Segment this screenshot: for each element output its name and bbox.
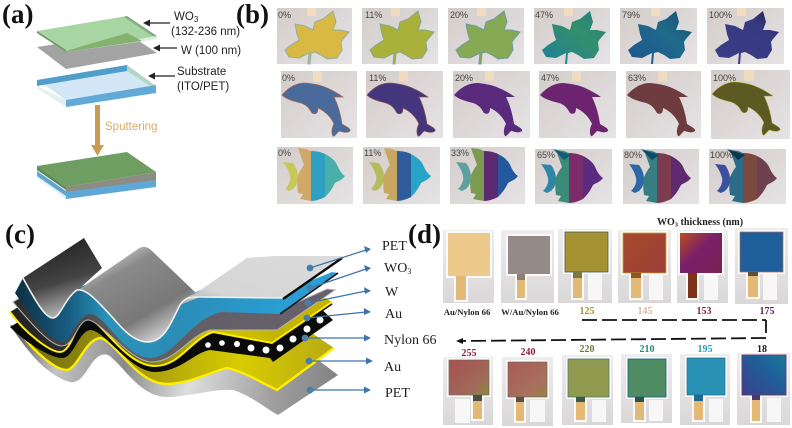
arrow: to WO3 (143, 20, 170, 26)
edge: black under Au (272, 304, 332, 345)
label: WO3: WO (174, 11, 194, 23)
label: 220: 220 (580, 344, 594, 355)
dolphin 11% (366, 71, 443, 138)
fish 100% (709, 149, 786, 204)
label: WO3 thickness: (132-236 nm) (171, 26, 240, 38)
leaf 100% (707, 8, 784, 64)
sample: 18 nm (737, 353, 790, 425)
edge: lower Au bright line (22, 335, 334, 390)
dolphin 0%: 0% (282, 73, 295, 83)
layer: lower Au (22, 320, 334, 390)
sample: Au/Nylon 66 (443, 230, 494, 303)
sample: 153 nm (677, 230, 728, 303)
result: sputtered stack (37, 152, 156, 199)
sample: 255 nm (443, 357, 493, 425)
leaf 0% (277, 8, 352, 64)
leaf 20% (448, 8, 524, 64)
dolphin 47%: 47% (541, 73, 559, 83)
callout arrow: W (305, 287, 371, 306)
sample: 145 nm (618, 230, 671, 303)
sample: 240 nm (502, 357, 553, 426)
label: W thickness: W (100 nm) (181, 45, 241, 57)
arrow: sputtering (91, 105, 104, 156)
leaf 11%: 11% (365, 10, 382, 20)
panel b: leaf row (277, 8, 784, 64)
fish 33%: 33% (451, 148, 469, 158)
label: 125: 125 (580, 306, 594, 317)
panel a: sputtering schematic (37, 11, 241, 199)
label: 195: 195 (698, 344, 712, 355)
edge: upper Au bright line (10, 302, 332, 366)
heading: WO3 thickness: 3 (675, 222, 679, 228)
callout arrow: PET (307, 246, 371, 271)
label: Substrate: Substrate (177, 66, 226, 78)
fish 100%: 100% (710, 150, 733, 160)
callout arrow: Au upper (304, 308, 371, 321)
callout arrow: PET lower (307, 386, 371, 394)
panel d: WO3 thickness samples (443, 217, 790, 426)
label: WO3: WO (384, 261, 407, 276)
panel b: fish row (277, 147, 786, 204)
edge: top PET white fold line (23, 278, 283, 342)
arrow: to substrate (148, 72, 175, 80)
fish 80%: 80% (624, 150, 642, 160)
dolphin 20% (453, 71, 530, 138)
label: 240: 240 (520, 347, 536, 358)
leaf 47% (534, 8, 610, 64)
leaf 11% (362, 8, 438, 64)
label: Au/Nylon 66: Au/Nylon 66 (444, 307, 491, 317)
layer: WO3 film (37, 16, 157, 52)
dolphin 20%: 20% (455, 73, 473, 83)
panel label: (c): (c) (5, 219, 35, 249)
label: WO3: 3 (194, 15, 199, 24)
layer: W (13, 289, 335, 362)
label: 145: 145 (638, 306, 652, 317)
dolphin 100% (711, 70, 790, 139)
dolphin 11%: 11% (369, 73, 386, 83)
label: 210: 210 (640, 344, 654, 355)
label: W: W (385, 285, 399, 300)
panel label: (d): (d) (408, 219, 441, 249)
layer: upper Au (10, 298, 332, 366)
label: 18: 18 (757, 344, 767, 355)
label: PET: PET (382, 239, 407, 254)
panel c: flexible multilayer device (10, 238, 436, 415)
layer: W film (37, 33, 157, 69)
label: 175: 175 (760, 306, 774, 317)
dolphin 47% (539, 71, 616, 138)
leaf 47%: 47% (535, 10, 553, 20)
dolphin 63% (626, 71, 701, 138)
fish 33% (450, 147, 525, 204)
fish 11% (363, 147, 440, 204)
fish 11%: 11% (364, 148, 381, 158)
label: PET: PET (385, 386, 410, 401)
sample: 125 nm (558, 229, 612, 303)
sample: 175 nm (735, 228, 788, 304)
fish 65% (535, 149, 612, 204)
label: W/Au/Nylon 66: W/Au/Nylon 66 (501, 307, 559, 317)
label: ITO/PET: (ITO/PET) (177, 81, 229, 93)
leaf 20%: 20% (450, 10, 468, 20)
label: 153: 153 (696, 306, 712, 317)
sample: W/Au/Nylon 66 (501, 230, 554, 303)
layer: substrate ITO/PET (37, 65, 156, 107)
panel b: dolphin row (281, 70, 790, 139)
layer: nylon 66 (10, 306, 333, 372)
layer: top PET right (180, 256, 343, 305)
layer: top PET back sheet (23, 238, 102, 318)
label: Nylon 66: Nylon 66 (384, 333, 436, 348)
edge: lower PET white fold (78, 355, 117, 381)
sample: 210 nm (621, 354, 672, 423)
label: WO3: 3 (407, 267, 411, 276)
leaf 0%: 0% (278, 10, 291, 20)
layer: top PET middle fold (78, 247, 196, 342)
label: 255: 255 (462, 348, 476, 359)
label: Au: Au (384, 360, 401, 375)
heading: WO3 thickness: WO (657, 217, 675, 228)
edge: black under WO3 (280, 273, 338, 314)
arrow: dashed sequence path (456, 320, 766, 344)
sample: 195 nm (680, 354, 730, 425)
fish 0% (277, 147, 353, 204)
leaf 79% (620, 8, 697, 64)
label: Au: Au (385, 307, 402, 322)
fish 80% (623, 149, 699, 204)
leaf 79%: 79% (622, 10, 640, 20)
dolphin 0% (281, 71, 357, 138)
layer: lower PET (10, 325, 338, 415)
dolphin 100%: 100% (713, 73, 736, 83)
label: Sputtering: Sputtering (105, 121, 157, 133)
nylon pores (205, 316, 324, 354)
leaf 100%: 100% (709, 10, 732, 20)
fish 0%: 0% (278, 148, 291, 158)
edge: top PET black rim (283, 258, 342, 299)
layer: WO3 (15, 272, 338, 358)
heading: WO3 thickness: thickness (nm) (678, 217, 743, 228)
callout arrow: Nylon 66 (302, 334, 371, 342)
fish 65%: 65% (537, 150, 555, 160)
arrow: to W (153, 44, 177, 52)
callout arrow: Au lower (306, 358, 373, 364)
sample: 220 nm (562, 355, 613, 425)
callout arrow: WO3 (307, 265, 371, 291)
dolphin 63%: 63% (628, 73, 646, 83)
